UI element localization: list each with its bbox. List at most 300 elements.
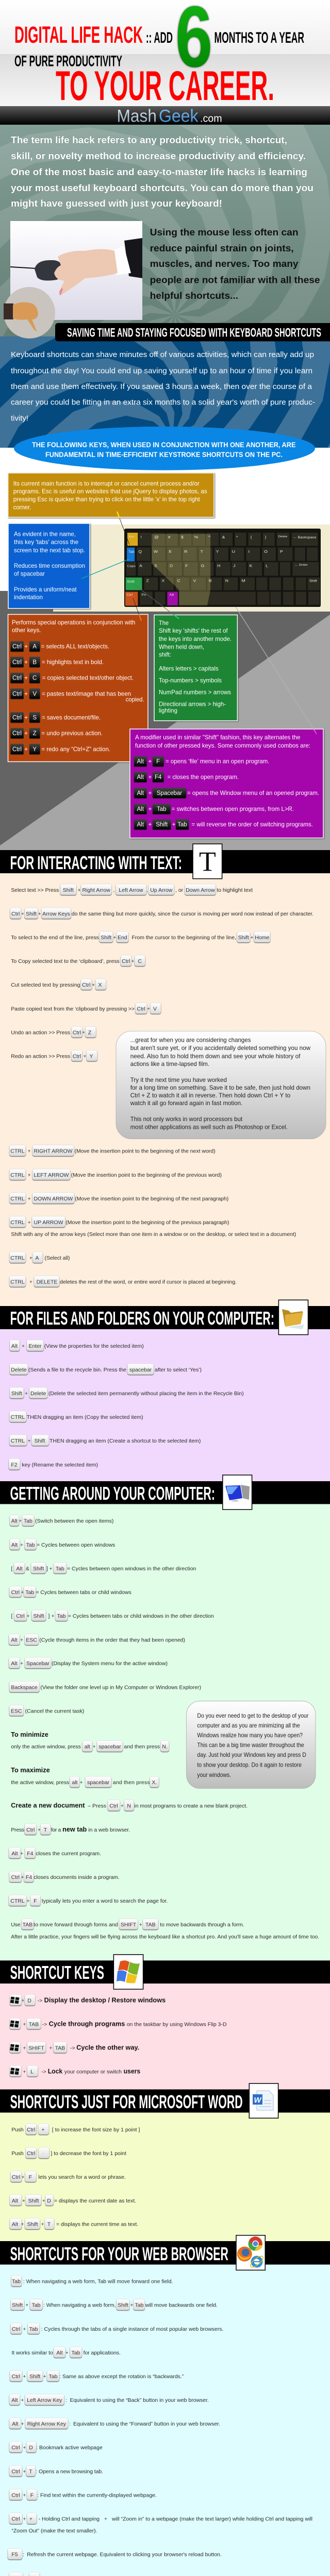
shortcut row: ctrl shift tab: Tab: [57, 1613, 66, 1619]
shortcut row: new tab: +: [38, 1827, 41, 1833]
image: keyboard: Delete: [278, 535, 287, 538]
shortcut row: word search: +: [21, 2174, 25, 2180]
shortcut row: new tab browser: +: [23, 2468, 26, 2475]
shortcut row: decrease font: Push: [11, 2150, 24, 2157]
shortcut row: win l: Lock: [48, 2067, 62, 2075]
shortcut row: new tab browser: T: [29, 2468, 32, 2475]
shortcut row: maximize: [11, 1776, 159, 1787]
shortcut row: arrow keys: Ctrl: [11, 911, 20, 917]
image: keyboard: C: [177, 579, 180, 583]
shortcut row: refresh: Refresh the current webpage. Equivalent to clicking your browser's reload button.: [27, 2552, 222, 2558]
shortcut row: f2: key (Rename the selected item): [22, 1462, 98, 1468]
shortcut row: win l: +: [23, 2069, 26, 2075]
arrow: tab pointer: [81, 559, 129, 579]
shortcut: alt spacebar: Alt: [137, 790, 144, 796]
shortcut row: ctrl right arrow: (Move the insertion point to the beginning of the next word): [74, 1148, 216, 1155]
arrow: ctrl pointer: [133, 598, 141, 621]
heading: of pure productivity: OF PURE PRODUCTIVITY: [14, 53, 122, 70]
shortcut row: alt esc: [9, 1634, 185, 1645]
shortcut: ctrl s: [10, 712, 101, 722]
text block: intro paragraph: The term life hack refers to any productivity trick, shortcut,: [11, 134, 287, 145]
shortcut row: shift tab form: +: [25, 2302, 28, 2309]
shortcut row: copy: +: [131, 958, 135, 964]
shortcut row: ctrl down arrow: (Move the insertion point to the beginning of the next paragraph): [75, 1196, 228, 1202]
shortcut row: win tab: Cycle through programs: [49, 2020, 125, 2027]
shortcut row: zoom: will “Zoom in” to a webpage (make the text larger) while holding Ctrl and tapping will: [111, 2516, 312, 2522]
shortcut row: ctrl shift tab browser: Ctrl: [12, 2374, 20, 2380]
shortcut row: select text: Up Arrow: [150, 887, 173, 893]
shortcut: alt f: = opens ‘file’ menu in an open program.: [166, 757, 269, 765]
panel: shift key explanation: Directional arrows > high-: [159, 701, 226, 708]
image: keyboard: ← Backspace: [293, 536, 317, 539]
shortcut: alt shift tab: +: [148, 822, 152, 828]
shortcut row: forward: +: [21, 2421, 24, 2427]
shortcut row: alt enter: (View the properties for the selected item): [44, 1343, 144, 1349]
shortcut row: redo: Ctrl: [73, 1053, 81, 1059]
shortcut row: ctrl f4: closes documents inside a program.: [34, 1874, 120, 1880]
icon: thumbs down: [4, 287, 55, 338]
shortcut row: forward: Alt: [12, 2421, 19, 2427]
shortcut: ctrl z: Ctrl: [12, 731, 22, 737]
panel: shift key explanation: Shift key 'shifts' the rest of: [159, 627, 228, 634]
shortcut: ctrl z: Z: [33, 731, 37, 737]
shortcut row: tab through forms: TAB: [145, 1922, 156, 1928]
shortcut row: paste: [11, 1003, 161, 1014]
image: keyboard: F: [185, 564, 188, 568]
panel: saving time: [0, 336, 330, 448]
section: getting around: [0, 1475, 330, 1960]
panel: tab key explanation: As evident in the name,: [14, 531, 76, 538]
shortcut row: ctrl shift tab browser: +: [43, 2374, 46, 2380]
text block: saving time paragraph: them and use them effectively. If you saved 3 hours a week, then over the course of a: [11, 382, 312, 391]
shortcut row: ctrl shift tab: ]: [48, 1613, 50, 1619]
shortcut row: win l: ->: [41, 2069, 46, 2075]
shortcut: alt shift tab: Alt: [137, 822, 144, 828]
shortcut row: ctrl drag: THEN dragging an item (Copy the selected item): [27, 1414, 143, 1420]
panel: life hack intro: [0, 125, 330, 336]
callout: undo redo tip: ...great for when you are considering changes: [130, 1037, 251, 1044]
shortcut row: ctrl up arrow: +: [28, 1219, 31, 1226]
shortcut row: cut: Cut selected text by pressing: [11, 982, 80, 988]
shortcut row: minimize: [11, 1741, 169, 1752]
shortcut row: select text: Shift: [63, 887, 74, 893]
shortcut row: current time: Alt: [12, 2222, 18, 2228]
panel: esc key explanation: Its current main function is to interrupt or cancel current process and/or: [13, 480, 200, 487]
image: keyboard: (: [251, 535, 252, 539]
shortcut row: alt enter: +: [22, 1343, 25, 1349]
shortcut: alt f: +: [148, 758, 152, 765]
shortcut row: alt spacebar: Spacebar: [26, 1660, 50, 1667]
panel: esc key explanation: programs. Esc is useful on websites that use jQuery to display photos, as: [13, 488, 207, 495]
shortcut row: alt shift tab: [11, 1563, 196, 1573]
shortcut row: alt shift tab: = Cycles between open windows in the other direction: [67, 1566, 196, 1572]
shortcut row: current time: +: [21, 2222, 24, 2228]
shortcut row: ctrl delete: +: [29, 1279, 32, 1285]
callout: show desktop tip: day. Just hold your Windows key and press D: [197, 1751, 306, 1758]
panel: tab key explanation: screen to the next tab stop.: [14, 547, 85, 554]
shortcut: alt f4: = closes the open program.: [167, 773, 239, 781]
shortcut row: ctrl f: [9, 1895, 168, 1906]
icon: computer: [223, 1475, 252, 1510]
icon: folder: [278, 1300, 308, 1335]
shortcut row: undo: +: [82, 1029, 85, 1036]
shortcut row: similar to alt tab: It works similar to: [11, 2350, 53, 2356]
image: keyboard: ^: [208, 535, 210, 539]
shortcut row: arrow keys: +: [21, 911, 24, 917]
shortcut: alt f4: Alt: [137, 774, 144, 781]
shortcut row: select text: +: [77, 887, 81, 893]
image: keyboard: P: [280, 550, 283, 554]
image: keyboard: B: [209, 579, 212, 583]
shortcut row: ctrl up arrow: CTRL: [10, 1219, 25, 1226]
shortcut row: current date: Shift: [28, 2198, 39, 2204]
callout: undo redo tip: [116, 1031, 326, 1139]
image: keyboard: V: [193, 579, 196, 583]
shortcut row: win d: [10, 1994, 166, 2005]
callout: undo redo tip: but aren't sure yet, or if you accidentally deleted something you now: [130, 1044, 310, 1052]
panel: shift key explanation: NumPad numbers > arrows: [159, 689, 231, 696]
shortcut row: new document: in most programs to create a new blank project.: [134, 1803, 248, 1809]
image: keyboard: Y: [216, 550, 219, 554]
shortcut row: alt f4: [9, 1848, 101, 1858]
shortcut row: decrease font: -: [42, 2150, 44, 2157]
shortcut row: bookmark: : Bookmark active webpage: [36, 2445, 103, 2451]
heading: add: :: ADD: [146, 29, 173, 46]
callout: fundamental keys ellipse: [14, 427, 315, 470]
shortcut row: ctrl delete: CTRL: [10, 1279, 25, 1285]
shortcut row: ctrl shift tab browser: : Same as above except the rotation is “backwards.”: [59, 2374, 184, 2380]
panel: esc key explanation: pressing Esc is quicker than trying to click on the little 'x' in the top right: [13, 496, 200, 503]
shortcut: alt spacebar: +: [148, 790, 152, 796]
shortcut row: word search: Ctrl: [12, 2174, 20, 2180]
panel: tab key explanation: Provides a uniform/neat: [14, 586, 77, 593]
logo bar: top: Mash: [117, 107, 157, 126]
image: keyboard: A: [139, 564, 143, 568]
shortcut: ctrl b: = highlights text in bold.: [42, 658, 104, 666]
shortcut row: ctrl shift tab: Ctrl: [16, 1613, 25, 1619]
shortcut row: new tab browser: : Opens a new browsing tab.: [36, 2468, 103, 2475]
shortcut row: redo: [11, 1050, 97, 1061]
panel: tab key explanation: indentation: [14, 594, 43, 601]
shortcut row: shift tab form: [11, 2299, 218, 2310]
shortcut row: select all: (Select all): [44, 1255, 70, 1261]
panel: modifier key background: [0, 591, 330, 850]
shortcut: alt shift tab: Shift: [156, 822, 168, 828]
shortcut row: ctrl left arrow: LEFT ARROW: [34, 1172, 69, 1178]
shortcut row: select text: to highlight text: [217, 887, 253, 893]
shortcut row: win tab: TAB: [29, 2021, 39, 2027]
text block: saving time paragraph: Keyboard shortcuts can shave minutes off of various activities, which can really add up: [11, 350, 314, 359]
shortcut row: maximize: and then press: [113, 1780, 150, 1786]
section: interacting with text: [0, 844, 330, 1306]
shortcut row: cut: +: [92, 982, 95, 988]
shortcut row: alt tab switch: Alt: [11, 1518, 18, 1524]
shortcut row: arrow keys: [10, 908, 314, 919]
shortcut row: paste: Ctrl: [137, 1006, 145, 1012]
shortcut row: alt enter: Enter: [28, 1343, 42, 1349]
text block: intro paragraph: might have guessed with just your keyboard!: [11, 198, 222, 209]
shortcut: alt f: Alt: [137, 758, 144, 765]
text block: saving time paragraph: tivity!: [11, 414, 28, 423]
image: keyboard: Q: [139, 550, 142, 554]
shortcut row: win tab: ->: [42, 2021, 47, 2027]
shortcut row: undo: Ctrl: [73, 1029, 81, 1036]
shortcut row: delete: after to select ‘Yes’): [155, 1367, 202, 1373]
shortcut row: tab through forms: to move backwards through a form.: [160, 1922, 244, 1928]
image: keyboard: *: [236, 535, 238, 539]
shortcut row: ctrl f: typically lets you enter a word to search the page for.: [42, 1898, 168, 1904]
shortcut row: word search: lets you search for a word or phrase.: [38, 2174, 126, 2180]
shortcut row: undo: Z: [88, 1029, 92, 1036]
section: files and folders: [0, 1300, 330, 1481]
shortcut row: win tab: [10, 2018, 227, 2029]
text block: mouse strain: helpful shortcuts...: [150, 290, 238, 301]
shortcut row: ctrl right arrow: CTRL: [10, 1148, 25, 1155]
shortcut row: zoom: [9, 2513, 312, 2524]
image: keyboard: !: [141, 535, 142, 539]
shortcut row: shift delete: Shift: [11, 1391, 22, 1397]
text block: intro paragraph: One of the most basic and easy-to-master life hacks is learning: [11, 166, 307, 177]
shortcut row: redo: Y: [89, 1053, 93, 1059]
shortcut row: tab form: Tab: [12, 2279, 21, 2285]
icon: letter T: T: [199, 846, 216, 877]
shortcut row: refresh: [8, 2549, 222, 2560]
shortcut row: ctrl left arrow: CTRL: [10, 1172, 25, 1178]
shortcut row: select text: ,: [146, 887, 148, 893]
text block: intro paragraph: skill, or novelty method to increase productivity and efficiency.: [11, 150, 306, 161]
shortcut: ctrl v: V: [32, 691, 37, 697]
panel: title header: [0, 0, 330, 109]
image: keyboard: J: [233, 564, 236, 568]
shortcut row: bookmark: Ctrl: [11, 2445, 20, 2451]
shortcut row: ctrl up arrow: [9, 1216, 229, 1227]
callout: undo redo tip: need. Also fun to hold them down and see your whole history of: [130, 1053, 301, 1060]
shortcut row: win l: users: [124, 2067, 140, 2075]
shortcut: alt f4: +: [148, 774, 152, 781]
shortcut row: ctrl tab browser: Ctrl: [12, 2326, 20, 2332]
shortcut row: ctrl f: CTRL: [10, 1898, 25, 1904]
arrow: shift pointer: [135, 585, 179, 619]
shortcut row: tab through forms: TAB: [23, 1922, 32, 1928]
shortcut row: tab form: : When navigating a web form, Tab will move forward one field.: [23, 2279, 173, 2285]
shortcut: ctrl c: [10, 673, 134, 683]
shortcut row: ctrl tab browser: : Cycles through the tabs of a single instance of most popular web browsers.: [41, 2326, 223, 2332]
shortcut row: ctrl tab browser: Tab: [29, 2326, 38, 2332]
shortcut row: ctrl right arrow: RIGHT ARROW: [34, 1148, 73, 1155]
shortcut row: alt f4: Alt: [11, 1851, 18, 1857]
shortcut row: ctrl up arrow: UP ARROW: [34, 1219, 63, 1226]
heading: to maximize: To maximize: [11, 1767, 50, 1774]
image: keyboard: L: [266, 564, 269, 568]
icon: word document: [249, 2083, 278, 2118]
shortcut row: shift tab form: +: [130, 2302, 134, 2309]
shortcut row: select text: Select text >> Press: [11, 887, 59, 893]
image: keyboard: N: [225, 579, 228, 583]
arrow: alt pointer: [236, 607, 317, 734]
shortcut row: ctrl tab: Tab: [25, 1589, 34, 1596]
shortcut row: copy: Ctrl: [122, 958, 130, 964]
shortcut row: select line: +: [251, 935, 254, 941]
shortcut row: forward: Right Arrow Key: [27, 2421, 67, 2427]
shortcut row: tab form: [11, 2276, 173, 2286]
callout: fundamental keys ellipse: FUNDAMENTAL IN TIME-EFFICIENT KEYSTROKE SHORTCUTS ON THE PC.: [45, 450, 283, 459]
shortcut row: bookmark: [9, 2442, 103, 2452]
image: keyboard: ← Enter: [294, 563, 308, 567]
shortcut: alt spacebar: Spacebar: [157, 790, 182, 796]
shortcut: ctrl s: S: [32, 715, 37, 721]
panel: shift key explanation: When held down,: [159, 643, 204, 650]
shortcut row: win d: Display the desktop / Restore windows: [44, 1996, 166, 2004]
image: keyboard: Caps: [127, 565, 136, 568]
panel: ctrl key explanation: Performs special operations in conjunction with: [12, 619, 135, 626]
shortcut row: win shift tab: TAB: [55, 2045, 65, 2051]
shortcut row: select line: Home: [255, 935, 269, 941]
shortcut row: new tab: for a: [51, 1827, 61, 1833]
shortcut row: find text: Ctrl: [11, 2492, 20, 2498]
image: keyboard: H: [217, 564, 221, 568]
shortcut row: alt tab cycles: [10, 1539, 115, 1550]
shortcut row: new document: N: [127, 1803, 131, 1809]
panel: tab key explanation: this key 'tabs' across the: [14, 538, 78, 546]
shortcut row: win d: ->: [38, 1997, 42, 2004]
shortcut row: alt enter: [10, 1340, 144, 1351]
shortcut row: esc: ESC: [11, 1708, 22, 1714]
shortcut row: back: +: [21, 2397, 24, 2403]
shortcut row: increase font: Ctrl: [27, 2127, 35, 2133]
shortcut row: backspace: Backspace: [11, 1684, 38, 1690]
shortcut row: new tab browser: [9, 2465, 103, 2476]
shortcut row: arrow keys: Shift: [26, 911, 37, 917]
shortcut row: shift tab form: will move backwards one field.: [145, 2302, 218, 2309]
heading: to minimize: To minimize: [11, 1731, 48, 1738]
shortcut row: ctrl shift drag: Shift: [34, 1438, 45, 1444]
image: keyboard: T: [201, 550, 203, 554]
shortcut row: ctrl right arrow: [9, 1145, 216, 1156]
shortcut row: increase font: [11, 2124, 140, 2134]
shortcut row: ctrl shift drag: THEN dragging an item (Create a shortcut to the selected item): [50, 1438, 201, 1444]
shortcut row: maximize: alt: [72, 1780, 78, 1786]
shortcut row: shift tab form: Shift: [118, 2302, 128, 2309]
logo bar: top: Geek: [159, 107, 199, 126]
shortcut row: decrease font: ] to decrease the font by 1 point: [51, 2150, 126, 2157]
shortcut row: tab through forms: SHIFT: [121, 1922, 137, 1928]
shortcut row: select text: ,: [113, 887, 114, 893]
image: keyboard: R: [184, 550, 188, 554]
text block: mouse strain: muscles, and nerves. Too many: [150, 258, 299, 269]
panel: shift key explanation: lighting: [159, 707, 177, 714]
shortcut row: alt f4: +: [20, 1851, 23, 1857]
shortcut: alt f: F: [156, 758, 160, 765]
callout: show desktop tip: Do you ever need to get to the desktop of your: [197, 1712, 308, 1719]
shortcut row: find text: : Find text within the currently-displayed webpage.: [37, 2492, 157, 2498]
shortcut row: alt esc: (Cycle through items in the order that they had been opened): [39, 1637, 185, 1643]
shortcut row: new tab: Ctrl: [26, 1827, 35, 1833]
panel: tab key explanation: Reduces time consumption: [14, 562, 85, 569]
shortcut: ctrl z: = undo previous action.: [41, 730, 103, 737]
shortcut row: alt esc: +: [20, 1637, 23, 1643]
shortcut row: ctrl shift drag: +: [28, 1438, 31, 1444]
shortcut row: ctrl tab: = Cycles between tabs or child windows: [36, 1589, 131, 1596]
shortcut row: select all: +: [29, 1255, 32, 1261]
shortcut row: refresh: F5: [11, 2552, 18, 2558]
shortcut: ctrl v: Ctrl: [12, 691, 22, 697]
shortcut row: ctrl shift tab browser: Shift: [29, 2374, 40, 2380]
shortcut row: ctrl f: F: [34, 1898, 37, 1904]
shortcut row: forward: :: [69, 2421, 71, 2427]
shortcut row: decrease font: Ctrl: [27, 2150, 35, 2157]
panel: alt key explanation: [130, 729, 323, 838]
image: keyboard: #: [168, 535, 171, 539]
shortcut row: bookmark: +: [23, 2445, 26, 2451]
shortcut row: alt f4: closes the current program.: [36, 1851, 101, 1857]
logo bar: top: .com: [200, 113, 222, 125]
shortcut row: back: Left Arrow Key: [27, 2397, 62, 2403]
shortcut row: increase font: +: [41, 2127, 45, 2133]
icon: browsers: [236, 2235, 265, 2270]
shortcut row: bookmark: D: [29, 2445, 33, 2451]
panel: shift key explanation: The: [159, 619, 169, 626]
callout: show desktop tip: computer and as you are minimizing all the: [197, 1722, 300, 1729]
shortcut row: win shift tab: +: [49, 2045, 52, 2051]
shortcut: ctrl y: = redo any “Ctrl+Z” action.: [41, 745, 110, 753]
shortcut: ctrl z: +: [24, 731, 28, 737]
shortcut row: ctrl up arrow: (Move the insertion point to the beginning of the previous paragraph): [65, 1219, 229, 1226]
shortcut row: new tab: T: [44, 1827, 47, 1833]
image: keyboard: M: [242, 579, 245, 583]
text: shift with arrow keys: Shift with any of the arrow keys (Select more than one item in a window or on the desktop, or select text in a document): [11, 1231, 296, 1238]
shortcut row: minimize: and then press: [124, 1744, 160, 1750]
shortcut row: alt tab switch: (Switch between the open items): [35, 1518, 113, 1524]
shortcut row: maximize: spacebar: [87, 1780, 110, 1786]
shortcut row: find text: [9, 2489, 157, 2500]
callout: undo redo tip: Ctrl + Z to watch it all in reverse. Then hold down Ctrl + Y to: [130, 1092, 291, 1099]
shortcut row: select line: To select to the end of the line, press: [11, 935, 99, 941]
shortcut row: arrow keys: do the same thing but more quickly, since the cursor is moving per word now instead of per character.: [72, 911, 314, 917]
panel: tab key explanation: of spacebar: [14, 570, 45, 577]
shortcut row: select text: [11, 884, 253, 895]
shortcut row: ctrl shift tab: [11, 1610, 214, 1621]
panel: esc key explanation: corner.: [13, 504, 31, 511]
shortcut row: alt shift tab: Tab: [56, 1566, 64, 1572]
shortcut row: copy: [11, 955, 145, 966]
shortcut row: select line: +: [113, 935, 116, 941]
shortcut row: ctrl shift tab browser: Tab: [49, 2374, 58, 2380]
callout: undo redo tip: Try it the next time you have worked: [130, 1076, 227, 1083]
shortcut: alt f: [134, 756, 269, 767]
text block: mouse strain: [150, 227, 320, 301]
shortcut row: current time: +: [41, 2222, 44, 2228]
shortcut row: alt spacebar: +: [20, 1660, 23, 1667]
shortcut: alt f4: [134, 772, 239, 782]
shortcut: ctrl v: = pastes text/image that has been: [42, 690, 131, 697]
shortcut: alt shift tab: Tab: [177, 822, 187, 828]
shortcut row: win l: your computer or switch: [64, 2069, 122, 2075]
shortcut row: back: [9, 2394, 209, 2405]
shortcut row: win tab: on the taskbar by using Windows Flip 3-D: [127, 2021, 227, 2027]
shortcut row: shift delete: [10, 1387, 244, 1398]
shortcut row: redo: Redo an action >> Press: [11, 1053, 70, 1059]
shortcut row: cut: [11, 979, 106, 990]
shortcut: ctrl s: +: [24, 715, 28, 721]
shortcut row: ctrl left arrow: +: [28, 1172, 31, 1178]
heading bar: shortcut keys: [0, 1960, 330, 1984]
shortcut row: new tab: new tab: [62, 1826, 87, 1833]
callout: show desktop tip: to show your desktop. Do it again to restore: [197, 1761, 302, 1768]
shortcut: ctrl v: +: [24, 691, 28, 697]
shortcut row: minimize: spacebar: [98, 1744, 121, 1750]
shortcut row: select line: Shift: [238, 935, 249, 941]
image: keyboard: G: [201, 564, 204, 568]
